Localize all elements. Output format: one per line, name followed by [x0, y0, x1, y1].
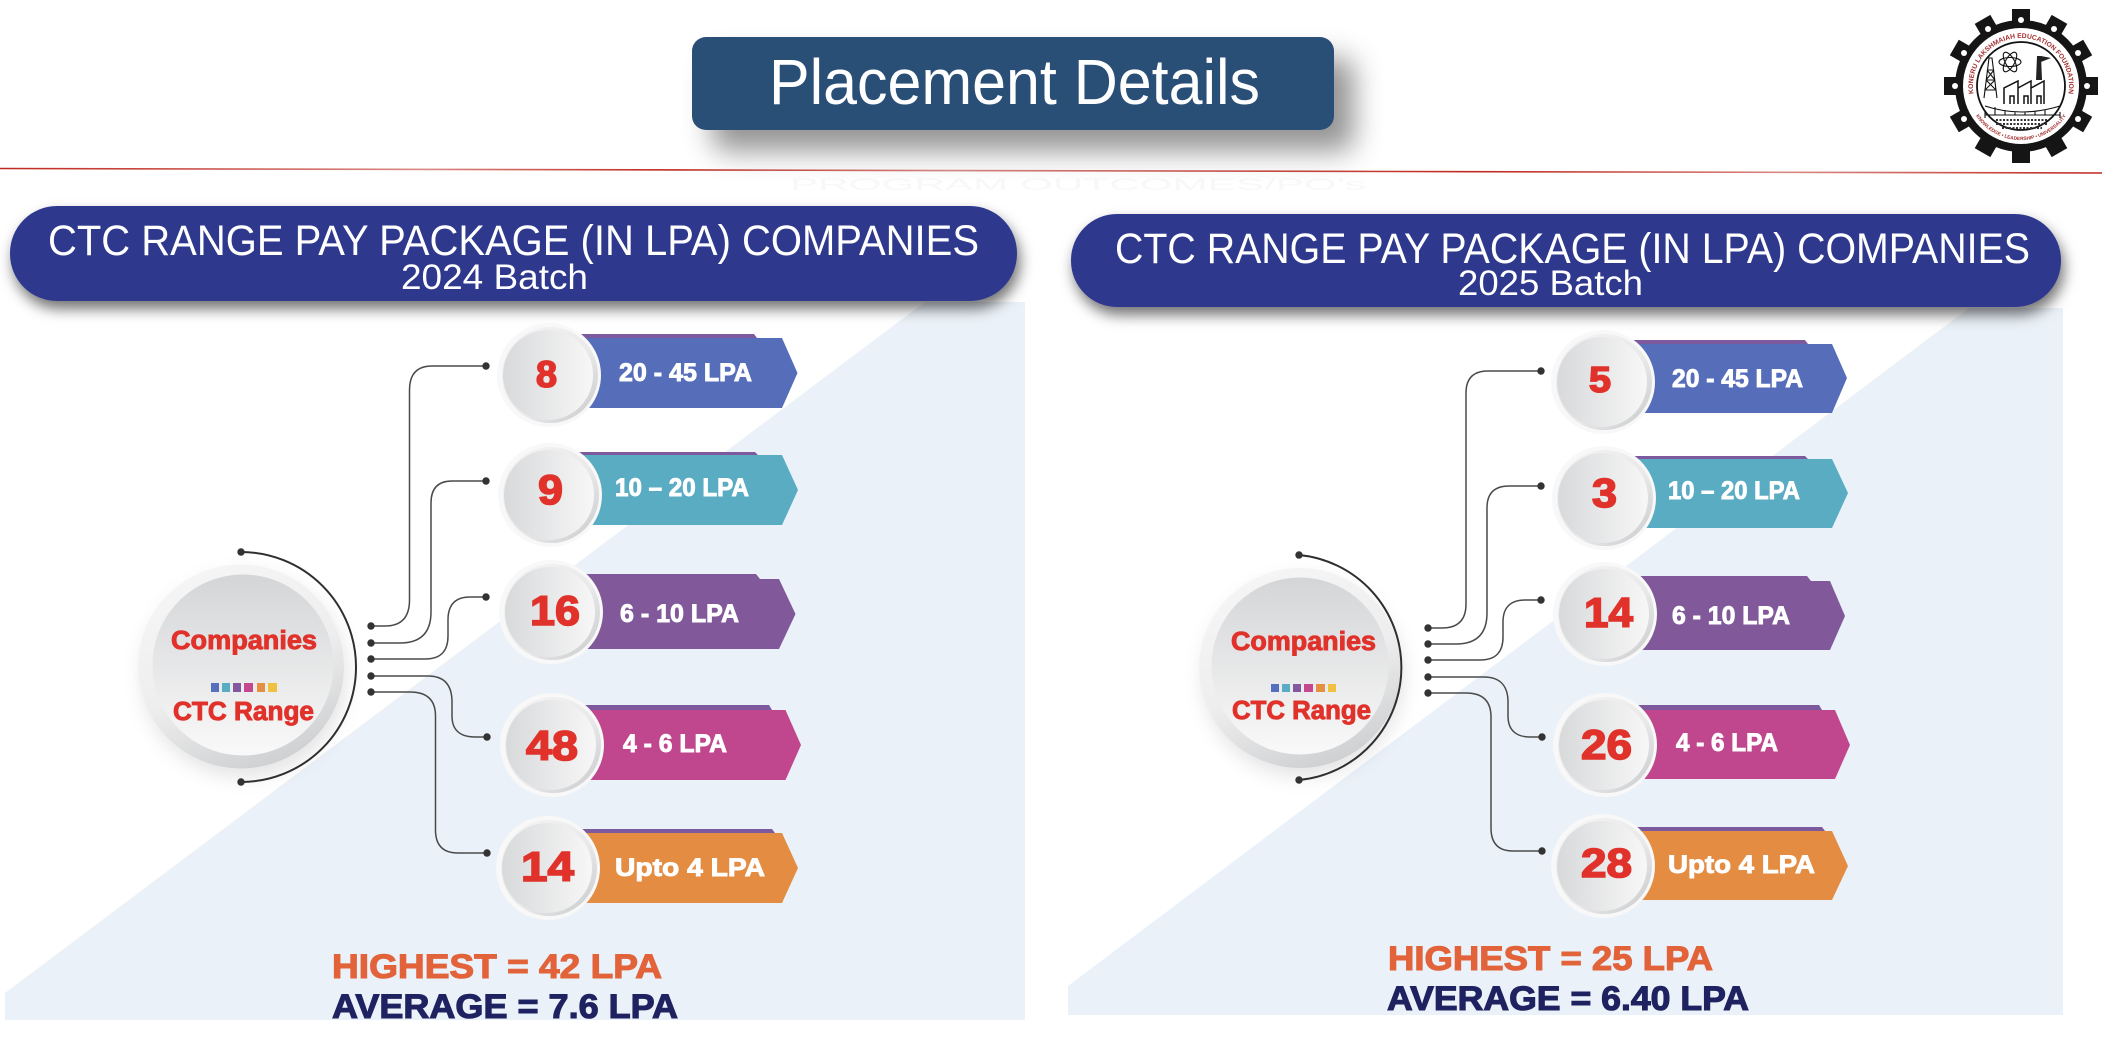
highest and average 2025	[1387, 940, 1749, 1018]
row: 26 companies 4-6 LPA: 4 - 6 LPA	[1676, 729, 1778, 757]
center circle: Companies / CTC Range	[138, 564, 344, 768]
row: 14 companies upto 4 LPA: 14	[521, 843, 575, 890]
panel background diagonal	[5, 302, 1025, 1020]
center circle: Companies / CTC Range: CTC Range	[1232, 697, 1371, 725]
row: 8 companies 20-45 LPA	[497, 323, 798, 427]
row: 28 companies upto 4 LPA: Upto 4 LPA	[1668, 851, 1815, 879]
heading banner 2025: 2025 Batch	[1458, 264, 1643, 303]
title banner	[692, 37, 1334, 130]
highest and average 2025: AVERAGE = 6.40 LPA	[1387, 980, 1749, 1018]
panel background diagonal	[1068, 308, 2063, 1015]
heading banner 2025	[1071, 214, 2061, 307]
row: 5 companies 20-45 LPA: 5	[1589, 359, 1611, 400]
row: 48 companies 4-6 LPA	[500, 693, 801, 797]
center circle: Companies / CTC Range: Companies	[1231, 628, 1376, 656]
highest and average 2024: HIGHEST = 42 LPA	[332, 948, 662, 986]
row: 16 companies 6-10 LPA: 16	[530, 587, 580, 634]
row: 3 companies 10-20 LPA	[1552, 446, 1848, 550]
center circle: Companies / CTC Range	[1199, 568, 1401, 768]
row: 28 companies upto 4 LPA	[1551, 814, 1848, 918]
row: 16 companies 6-10 LPA	[499, 560, 796, 664]
row: 14 companies 6-10 LPA	[1553, 562, 1845, 666]
row: 26 companies 4-6 LPA: 26	[1581, 721, 1632, 768]
row: 28 companies upto 4 LPA: 28	[1581, 840, 1632, 886]
row: 8 companies 20-45 LPA: 8	[536, 354, 557, 395]
heading banner 2024	[10, 206, 1017, 301]
connector lines	[237, 362, 491, 857]
row: 14 companies upto 4 LPA	[496, 816, 798, 920]
logo: Koneru Lakshmaiah Education Foundation gear emblem	[1944, 9, 2098, 163]
connector lines	[1295, 367, 1546, 855]
row: 48 companies 4-6 LPA: 4 - 6 LPA	[623, 730, 727, 758]
heading banner 2024: CTC RANGE PAY PACKAGE (IN LPA) COMPANIES	[48, 217, 979, 265]
logo: Koneru Lakshmaiah Education Foundation gear emblem: KNOWLEDGE • LEADERSHIP • UNIVERSALITY	[1976, 114, 2066, 140]
highest and average 2024: AVERAGE = 7.6 LPA	[332, 988, 678, 1026]
row: 5 companies 20-45 LPA: 20 - 45 LPA	[1672, 365, 1803, 393]
heading banner 2025: CTC RANGE PAY PACKAGE (IN LPA) COMPANIES	[1115, 225, 2030, 273]
row: 14 companies upto 4 LPA: Upto 4 LPA	[615, 854, 765, 882]
row: 16 companies 6-10 LPA: 6 - 10 LPA	[620, 600, 739, 628]
red divider line	[0, 168, 2102, 173]
row: 5 companies 20-45 LPA	[1551, 330, 1847, 434]
row: 14 companies 6-10 LPA: 6 - 10 LPA	[1672, 602, 1790, 630]
row: 9 companies 10-20 LPA: 10 – 20 LPA	[615, 474, 749, 502]
row: 26 companies 4-6 LPA	[1553, 693, 1850, 797]
row: 9 companies 10-20 LPA	[498, 443, 798, 547]
highest and average 2024	[332, 948, 678, 1026]
panel: 2024 batch	[5, 206, 1025, 1026]
title banner: Placement Details	[769, 46, 1260, 118]
panel: 2025 batch	[1068, 214, 2063, 1018]
row: 3 companies 10-20 LPA: 3	[1592, 470, 1617, 516]
row: 3 companies 10-20 LPA: 10 – 20 LPA	[1668, 477, 1800, 505]
row: 48 companies 4-6 LPA: 48	[526, 722, 578, 769]
heading banner 2024: 2024 Batch	[401, 258, 588, 297]
row: 9 companies 10-20 LPA: 9	[538, 466, 563, 513]
row: 8 companies 20-45 LPA: 20 - 45 LPA	[619, 359, 752, 387]
row: 14 companies 6-10 LPA: 14	[1584, 589, 1634, 636]
logo: Koneru Lakshmaiah Education Foundation gear emblem: KONERU LAKSHMAIAH EDUCATION FOUNDATION	[1968, 33, 2074, 94]
highest and average 2025: HIGHEST = 25 LPA	[1388, 940, 1713, 978]
center circle: Companies / CTC Range: CTC Range	[173, 698, 314, 726]
center circle: Companies / CTC Range: Companies	[171, 627, 317, 655]
faint ghost text under divider: PROGRAM OUTCOMES/PO's	[790, 175, 1366, 194]
